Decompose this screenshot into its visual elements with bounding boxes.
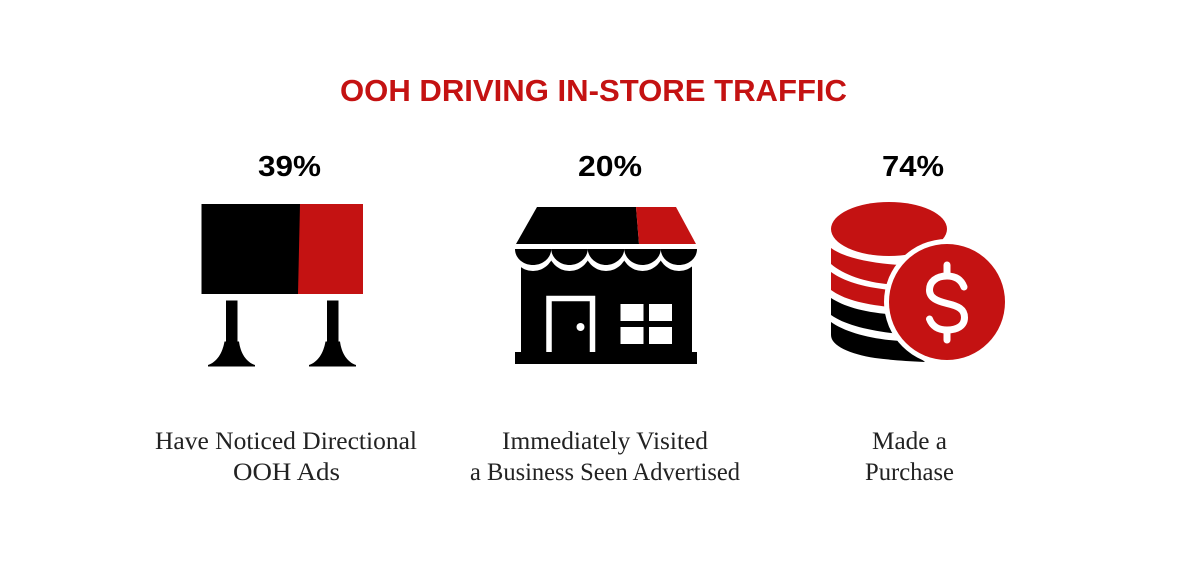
icon: coin stack with dollar <box>831 202 1010 365</box>
label: made a purchase: Made a <box>872 426 947 455</box>
label: immediately visited <box>470 426 740 486</box>
stat: 20%: 20% <box>578 151 642 183</box>
label: directional OOH ads <box>155 426 417 486</box>
label: made a purchase <box>865 426 954 486</box>
label: immediately visited: Immediately Visited <box>502 426 708 455</box>
label: immediately visited: a Business Seen Advertised <box>470 457 740 486</box>
label: made a purchase: Purchase <box>865 457 954 486</box>
stat: 74%: 74% <box>882 151 944 183</box>
icon: billboard <box>202 204 363 366</box>
stat: 39%: 39% <box>258 151 321 183</box>
title: OOH DRIVING IN-STORE TRAFFIC <box>340 73 847 108</box>
label: directional OOH ads: OOH Ads <box>233 457 340 486</box>
icon: storefront <box>505 207 707 364</box>
label: directional OOH ads: Have Noticed Directional <box>155 426 417 455</box>
